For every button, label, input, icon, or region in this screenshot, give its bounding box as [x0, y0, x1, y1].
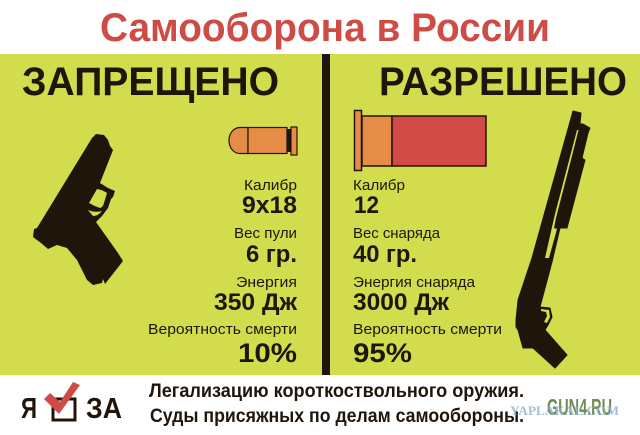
watermark: YAPLAKAL.COM: [510, 403, 619, 418]
footer: demand line two: Суды присяжных по делам самообороны.: [150, 406, 524, 427]
icon: pistol silhouette: [33, 134, 123, 285]
icon: checkbox: [53, 399, 75, 420]
label: death probability: Вероятность смерти: [353, 321, 502, 338]
divider between panels: [322, 54, 330, 375]
logo word: Я: Я: [21, 393, 37, 425]
icon: red check mark: [44, 382, 80, 414]
value: 350 J: 350 Дж: [214, 289, 298, 316]
footer: I am for logo: [21, 382, 122, 425]
label: caliber: Калибр: [353, 177, 405, 194]
value: 9x18: 9x18: [242, 192, 297, 219]
icon: shotgun silhouette: [516, 111, 590, 368]
heading: forbidden: ЗАПРЕЩЕНО: [22, 60, 279, 104]
label: caliber: Калибр: [244, 177, 297, 194]
title: Самооборона в России: [100, 6, 550, 50]
value: 95%: 95%: [353, 338, 412, 368]
value: 10%: 10%: [238, 338, 297, 368]
value: 12: 12: [354, 192, 379, 219]
icon: pistol bullet: [229, 127, 297, 155]
value: 6 g: 6 гр.: [246, 241, 297, 268]
label: shell weight: Вес снаряда: [353, 225, 441, 242]
label: death probability: Вероятность смерти: [148, 321, 297, 338]
label: energy: Энергия: [236, 274, 297, 291]
left stats: [148, 177, 298, 368]
label: bullet weight: Вес пули: [234, 225, 297, 242]
footer: demand line one: Легализацию короткоствольного оружия.: [149, 381, 524, 402]
heading: allowed: РАЗРЕШЕНО: [379, 60, 627, 104]
label: shell energy: Энергия снаряда: [353, 274, 476, 291]
value: 40 g: 40 гр.: [353, 241, 417, 268]
icon: shotgun shell: [354, 110, 486, 170]
value: 3000 J: 3000 Дж: [353, 289, 450, 316]
logo word: ЗА: ЗА: [86, 393, 122, 425]
right stats: [353, 177, 502, 368]
panel: green background: [0, 54, 640, 375]
